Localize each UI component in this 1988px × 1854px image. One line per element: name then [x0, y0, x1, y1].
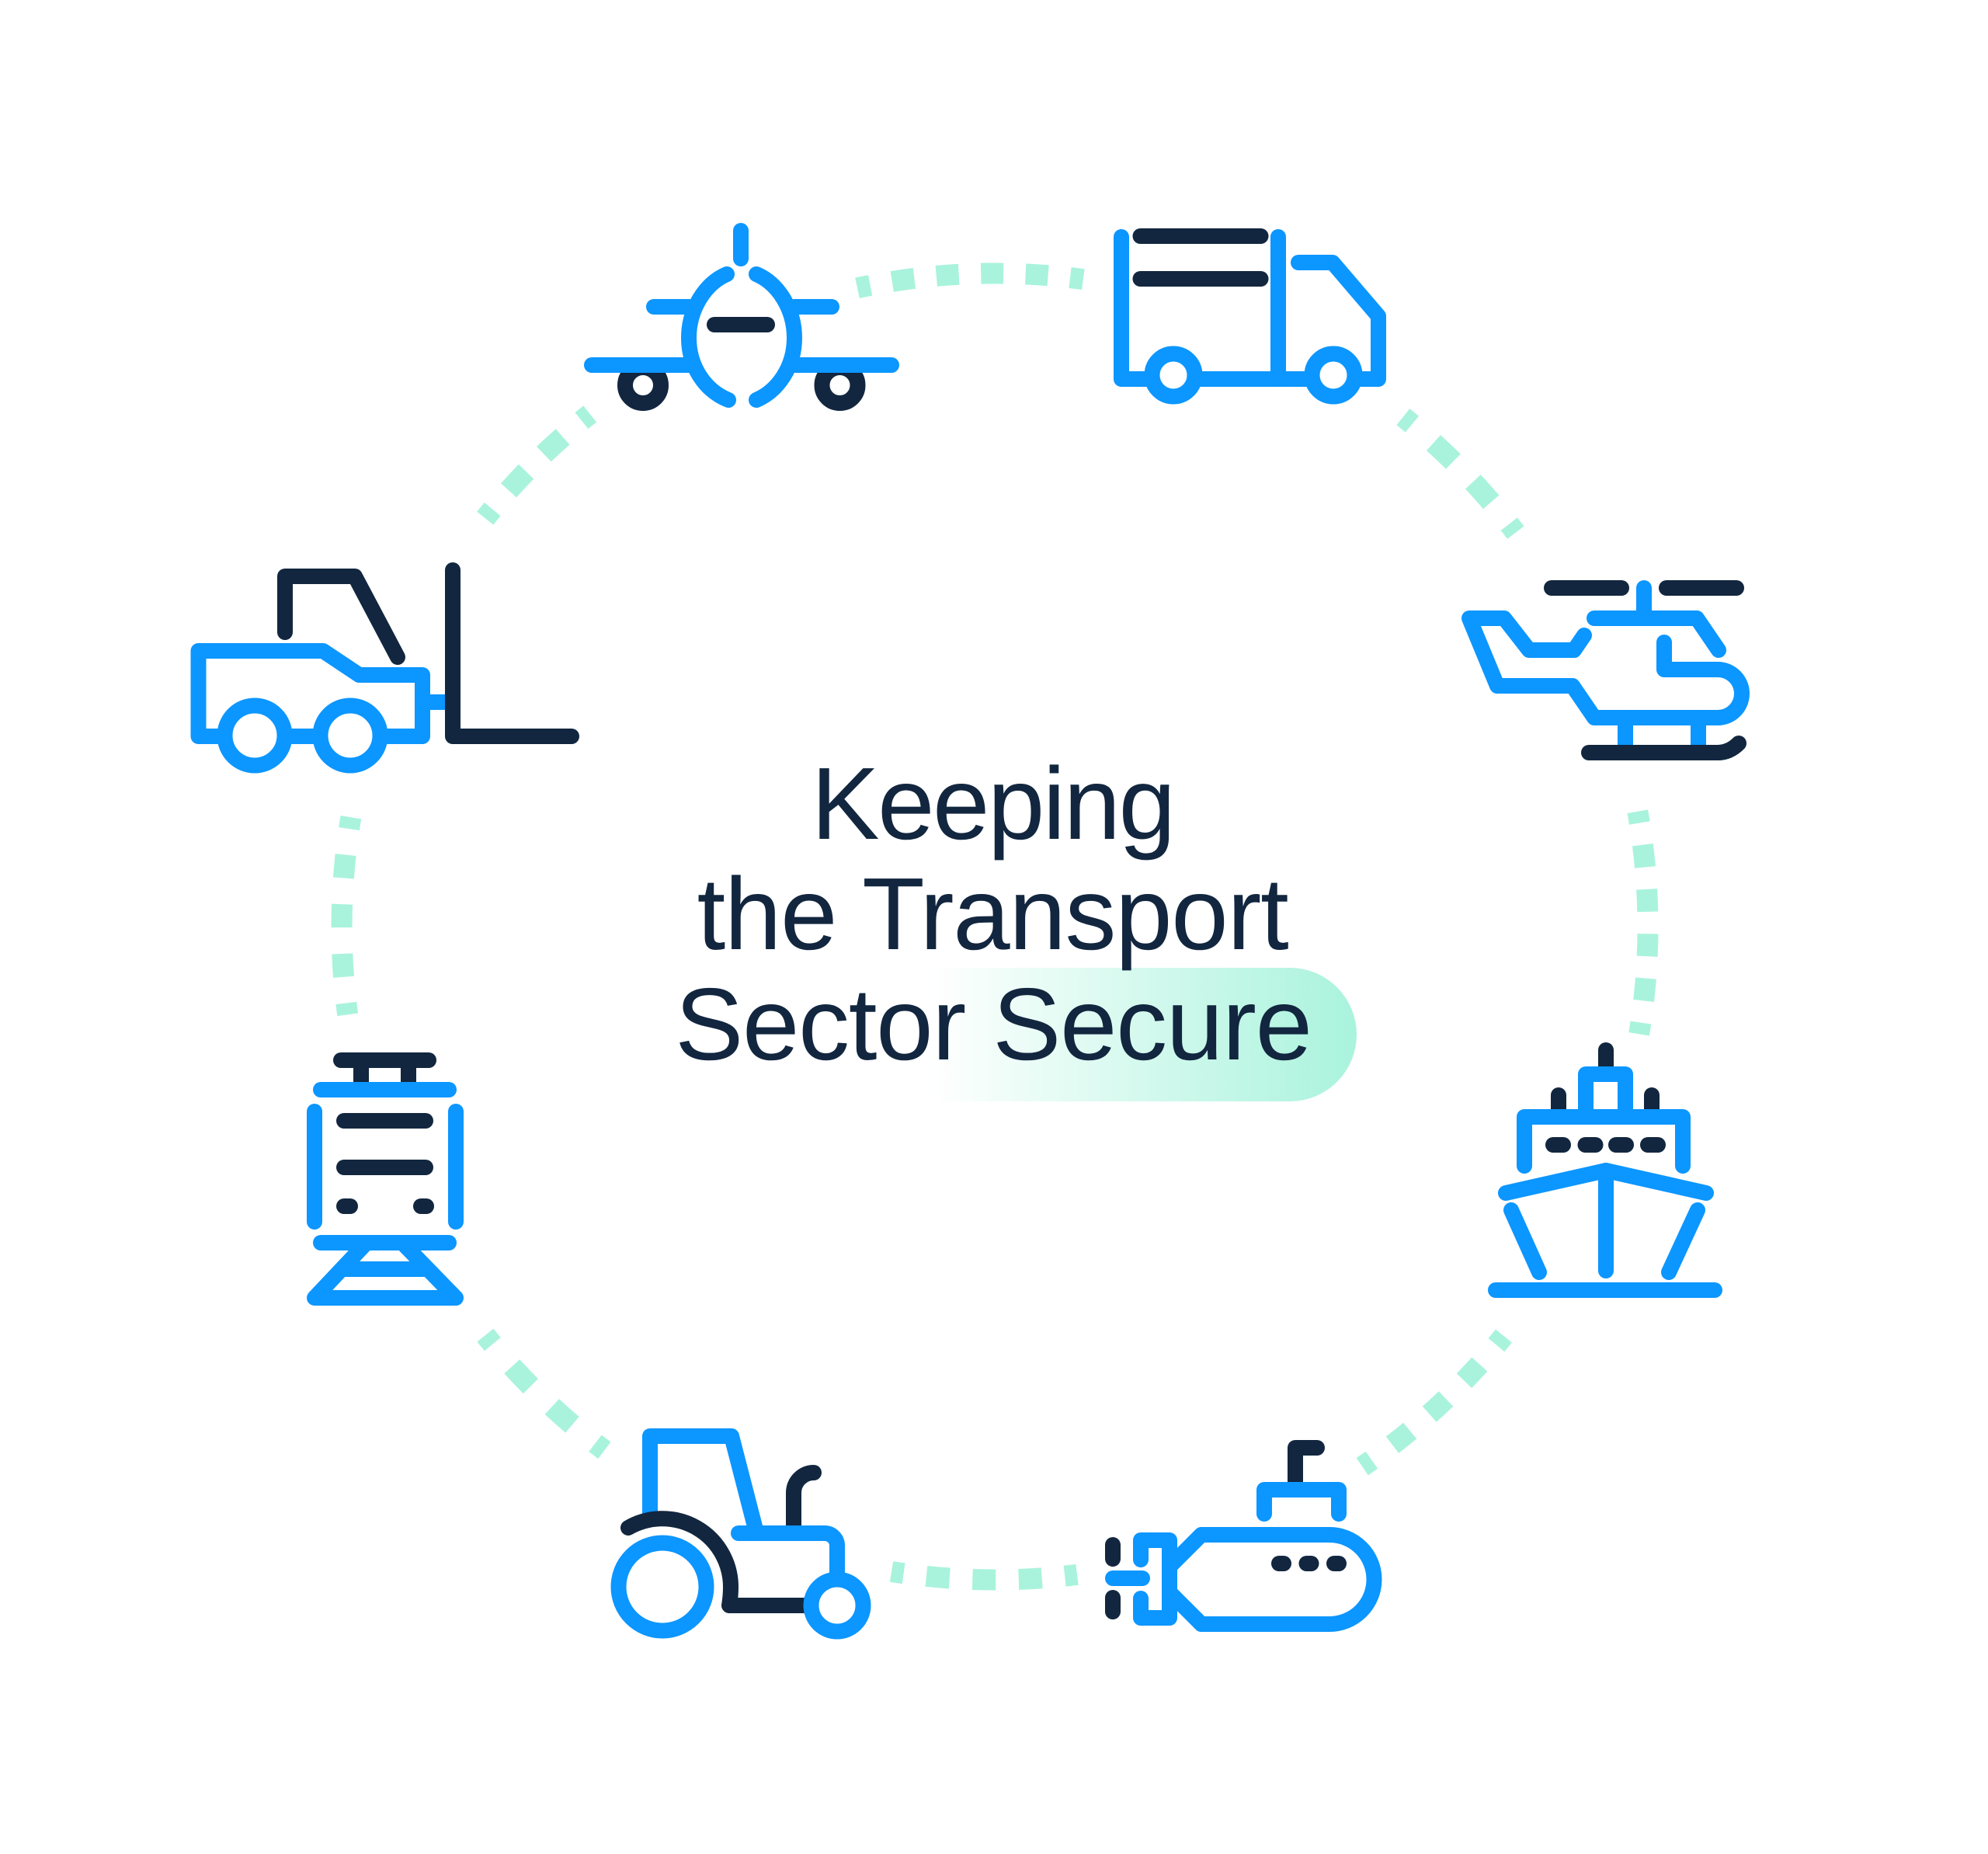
title: the Transport — [697, 857, 1288, 971]
highlight pill behind Secure — [932, 968, 1357, 1101]
dotted connector: ship to submarine — [1362, 1336, 1503, 1466]
icon: train — [315, 1060, 456, 1298]
icon: forklift — [199, 570, 572, 766]
dotted connector: submarine to tractor — [891, 1571, 1077, 1580]
dotted connector: helicopter to ship — [1638, 812, 1648, 1034]
title: Keeping — [812, 746, 1173, 861]
icon: truck — [1121, 236, 1378, 396]
dotted connector: train to forklift — [342, 817, 351, 1014]
dotted connector: plane to truck — [857, 273, 1083, 288]
icon: airplane — [592, 231, 891, 403]
dotted connector: truck to helicopter — [1403, 417, 1516, 533]
title: Sector Secure — [675, 967, 1312, 1081]
icon: submarine — [1113, 1448, 1375, 1624]
icon: tractor — [618, 1436, 864, 1631]
dotted connector: forklift to plane — [485, 414, 590, 518]
icon: helicopter — [1469, 588, 1742, 753]
title — [675, 746, 1312, 1081]
dotted connector: tractor to train — [485, 1335, 604, 1450]
icon: ship — [1496, 1050, 1715, 1290]
